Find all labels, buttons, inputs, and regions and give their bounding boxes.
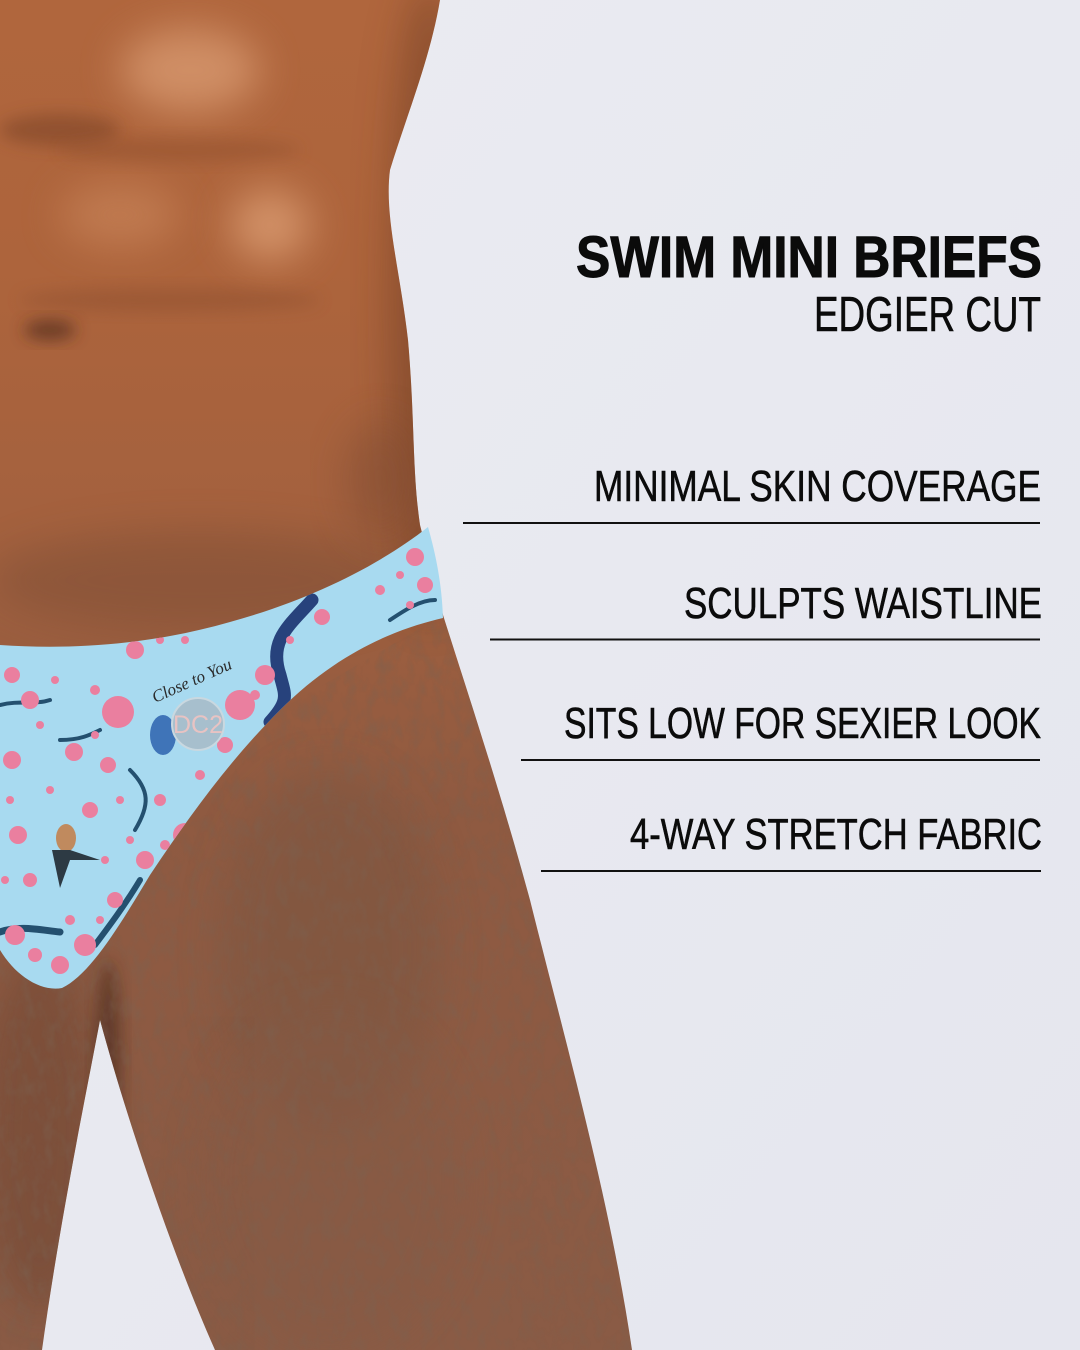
photo: model torso and legs [0, 0, 640, 1350]
script label on fabric: Close to You [149, 655, 235, 707]
photo: floral swim mini briefs [0, 527, 443, 989]
blue jay on fabric [150, 715, 176, 755]
leg hair texture [0, 600, 640, 1350]
feature list [463, 462, 1042, 872]
hummingbird on fabric [52, 824, 100, 888]
blossoms on fabric [1, 548, 433, 974]
heading [576, 225, 1042, 342]
branches on fabric [0, 600, 435, 945]
logo badge [172, 698, 224, 750]
logo badge: DC2 [173, 711, 223, 739]
